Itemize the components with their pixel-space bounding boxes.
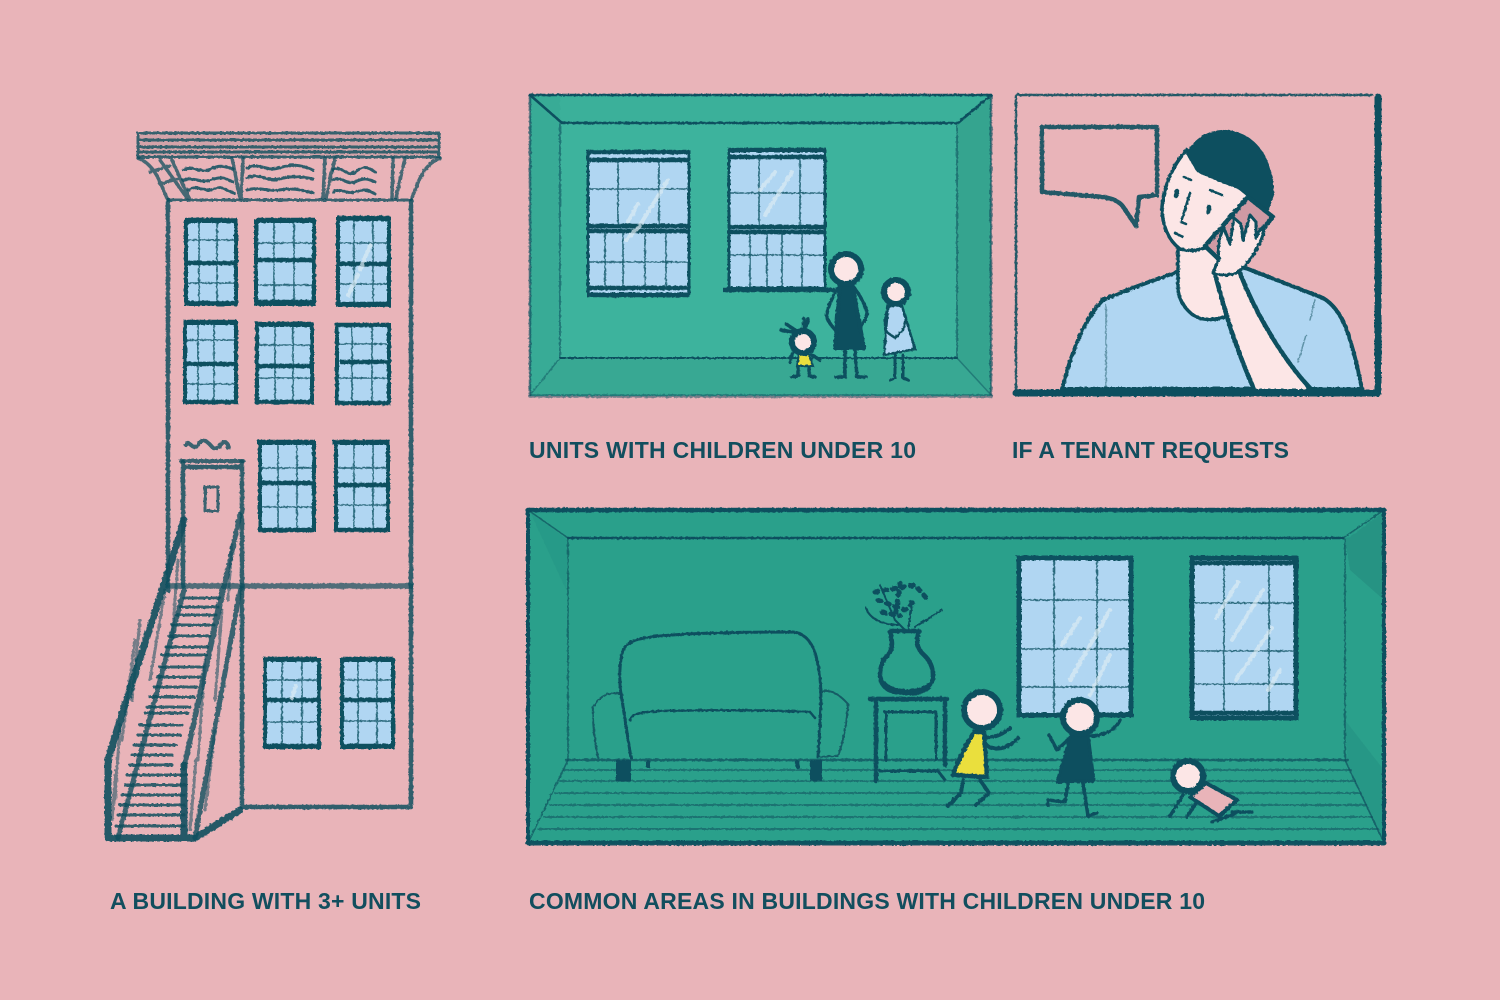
neck [1178, 240, 1226, 319]
panel: if a tenant requests [1016, 95, 1378, 393]
caption: units with children: UNITS WITH CHILDREN UNDER 10 [529, 437, 916, 463]
crawling baby [1170, 761, 1252, 822]
frame shadow edges [1016, 97, 1378, 393]
child in yellow dress [948, 692, 1018, 806]
windows: garden floor [264, 659, 394, 747]
frame [1016, 95, 1372, 392]
panel: building illustration [108, 133, 440, 838]
building facade [168, 200, 411, 807]
panel: common areas in buildings with children under 10 [528, 509, 1385, 844]
caption: building with 3+ units: A BUILDING WITH 3+ UNITS [110, 888, 421, 914]
window left [1019, 558, 1131, 715]
ornament above door [181, 441, 243, 461]
caption: tenant requests: IF A TENANT REQUESTS [1012, 437, 1289, 463]
room walls and floor [530, 95, 991, 396]
phone [1205, 197, 1273, 268]
windows: parlor floor [257, 442, 390, 530]
window right [1192, 558, 1296, 718]
toddler [781, 319, 820, 377]
side table [870, 699, 947, 781]
vase and flowers [866, 583, 942, 693]
door [183, 462, 242, 586]
windows: upper floors [183, 218, 391, 403]
room walls and floor [528, 509, 1385, 844]
person [1062, 130, 1362, 389]
window right [723, 150, 835, 290]
adult figure [827, 254, 867, 377]
speech bubble [1042, 127, 1157, 226]
face [1162, 150, 1250, 251]
hair [1186, 130, 1274, 212]
arm [1215, 273, 1307, 389]
stoop staircase [108, 515, 240, 838]
sofa [593, 632, 848, 781]
window left [587, 152, 690, 295]
caption: common areas: COMMON AREAS IN BUILDINGS WITH CHILDREN UNDER 10 [529, 888, 1205, 914]
facial features [1176, 191, 1209, 212]
cornice [138, 133, 440, 200]
panel: units with children under 10 [530, 95, 991, 396]
child in dark dress [1048, 700, 1120, 816]
older child [884, 280, 915, 380]
hand [1213, 215, 1264, 275]
t-shirt [1062, 262, 1362, 389]
